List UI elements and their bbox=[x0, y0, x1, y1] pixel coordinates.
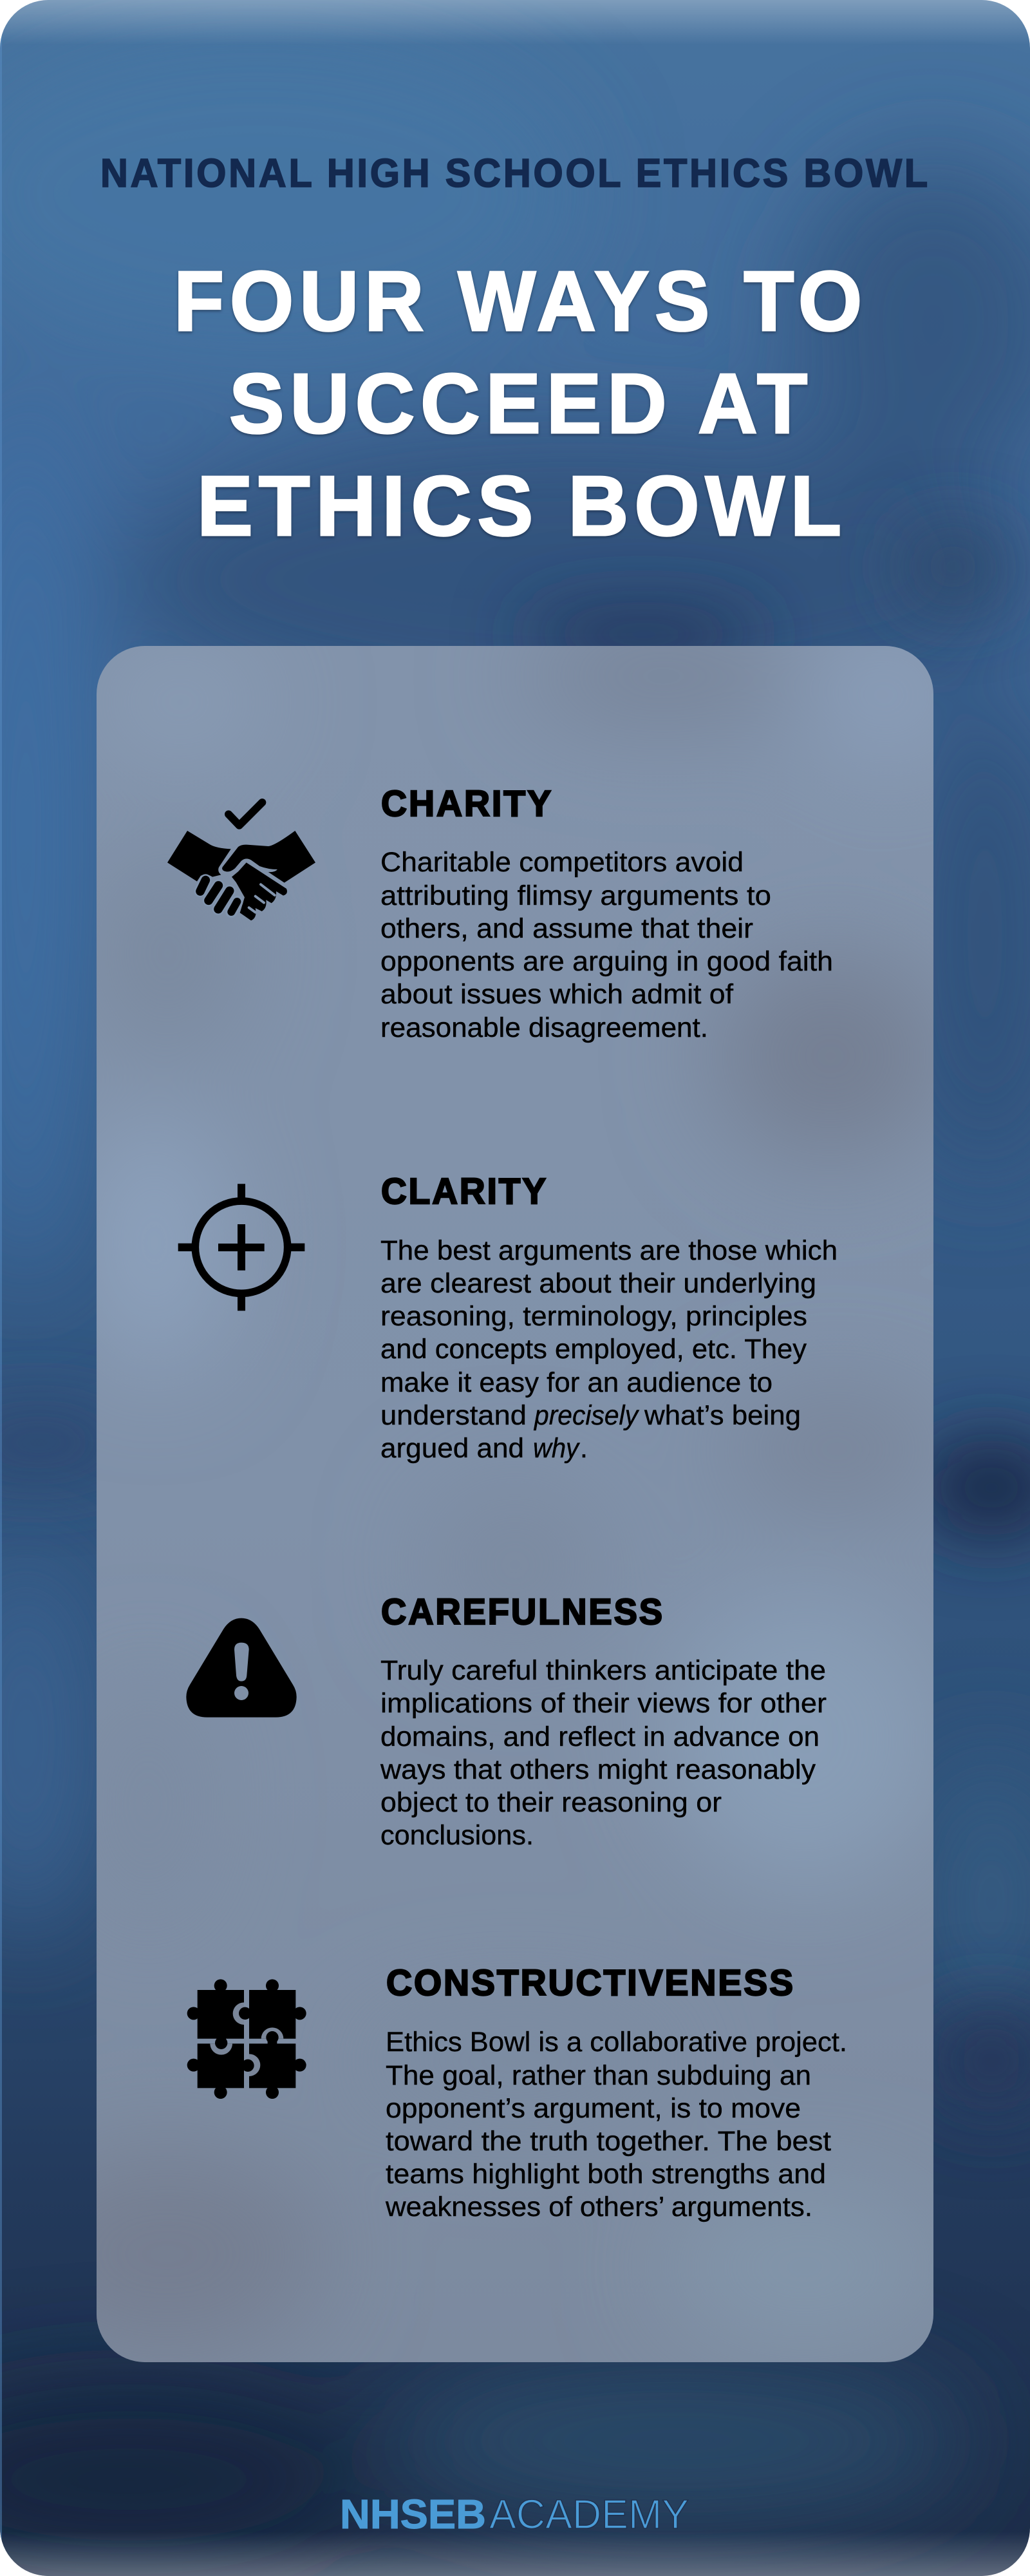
icon: puzzle pieces bbox=[187, 1979, 306, 2099]
text block: clarity: The best arguments are those which bbox=[380, 1235, 838, 1266]
section: carefulness bbox=[186, 1591, 827, 1851]
section: charity bbox=[167, 783, 833, 1043]
heading: clarity: CLARITY bbox=[381, 1171, 548, 1212]
text block: charity: about issues which admit of bbox=[380, 979, 734, 1010]
text block: carefulness: domains, and reflect in advance on bbox=[380, 1721, 819, 1752]
text block: clarity: make it easy for an audience to bbox=[380, 1367, 772, 1398]
heading: constructiveness: CONSTRUCTIVENESS bbox=[386, 1962, 795, 2003]
text block: charity: Charitable competitors avoid bbox=[380, 847, 744, 878]
text block: clarity bbox=[380, 1235, 838, 1464]
footer logo: NHSEB Academy: NHSEB bbox=[340, 2491, 486, 2537]
title bbox=[174, 254, 868, 553]
text block: constructiveness: teams highlight both strengths and bbox=[386, 2159, 826, 2190]
title: SUCCEED AT bbox=[229, 356, 813, 451]
title: ETHICS BOWL bbox=[197, 459, 847, 553]
text block: carefulness: object to their reasoning or bbox=[380, 1787, 722, 1818]
text block: constructiveness: Ethics Bowl is a collaborative project. bbox=[386, 2027, 847, 2058]
text block: charity bbox=[380, 847, 833, 1043]
icon: crosshair target bbox=[178, 1184, 304, 1311]
text block: clarity: are clearest about their underlying bbox=[380, 1268, 816, 1299]
section: clarity bbox=[178, 1171, 838, 1464]
text block: carefulness: implications of their views for other bbox=[380, 1688, 827, 1719]
text block: clarity: what’s being bbox=[644, 1400, 801, 1431]
text block: constructiveness: weaknesses of others’ arguments. bbox=[385, 2192, 812, 2222]
heading: charity: CHARITY bbox=[381, 783, 553, 824]
text block: charity: attributing flimsy arguments to bbox=[380, 880, 771, 911]
text block: carefulness bbox=[380, 1655, 827, 1851]
text block: charity: opponents are arguing in good faith bbox=[380, 946, 833, 977]
section: constructiveness bbox=[187, 1962, 847, 2222]
footer logo: NHSEB Academy: ACADEMY bbox=[489, 2491, 689, 2537]
text block: clarity: and concepts employed, etc. They bbox=[380, 1334, 807, 1365]
text block: carefulness: ways that others might reasonably bbox=[380, 1754, 816, 1785]
text block: charity: others, and assume that their bbox=[380, 913, 753, 944]
panel: frosted card bbox=[97, 646, 933, 2362]
text block: clarity: . bbox=[580, 1433, 588, 1464]
footer logo: NHSEB Academy bbox=[340, 2491, 689, 2537]
text block: clarity: precisely bbox=[533, 1400, 639, 1431]
icon: warning triangle bbox=[186, 1618, 297, 1718]
text block: clarity: why bbox=[533, 1433, 580, 1464]
icon: handshake with check mark bbox=[167, 802, 315, 920]
heading: carefulness: CAREFULNESS bbox=[381, 1591, 664, 1633]
text block: carefulness: Truly careful thinkers anticipate the bbox=[380, 1655, 826, 1686]
text block: clarity: reasoning, terminology, principles bbox=[380, 1301, 807, 1332]
subtitle: National High School Ethics Bowl: NATIONAL HIGH SCHOOL ETHICS BOWL bbox=[100, 151, 930, 196]
text block: constructiveness: The goal, rather than subduing an bbox=[386, 2060, 811, 2091]
text block: charity: reasonable disagreement. bbox=[380, 1012, 708, 1043]
text block: carefulness: conclusions. bbox=[380, 1820, 534, 1851]
text block: constructiveness: opponent’s argument, is to move bbox=[386, 2093, 801, 2124]
title: FOUR WAYS TO bbox=[174, 254, 868, 348]
text block: constructiveness: toward the truth together. The best bbox=[386, 2126, 831, 2157]
text block: clarity: argued and bbox=[380, 1433, 524, 1464]
text block: clarity: understand bbox=[380, 1400, 527, 1431]
text block: constructiveness bbox=[385, 2027, 847, 2222]
